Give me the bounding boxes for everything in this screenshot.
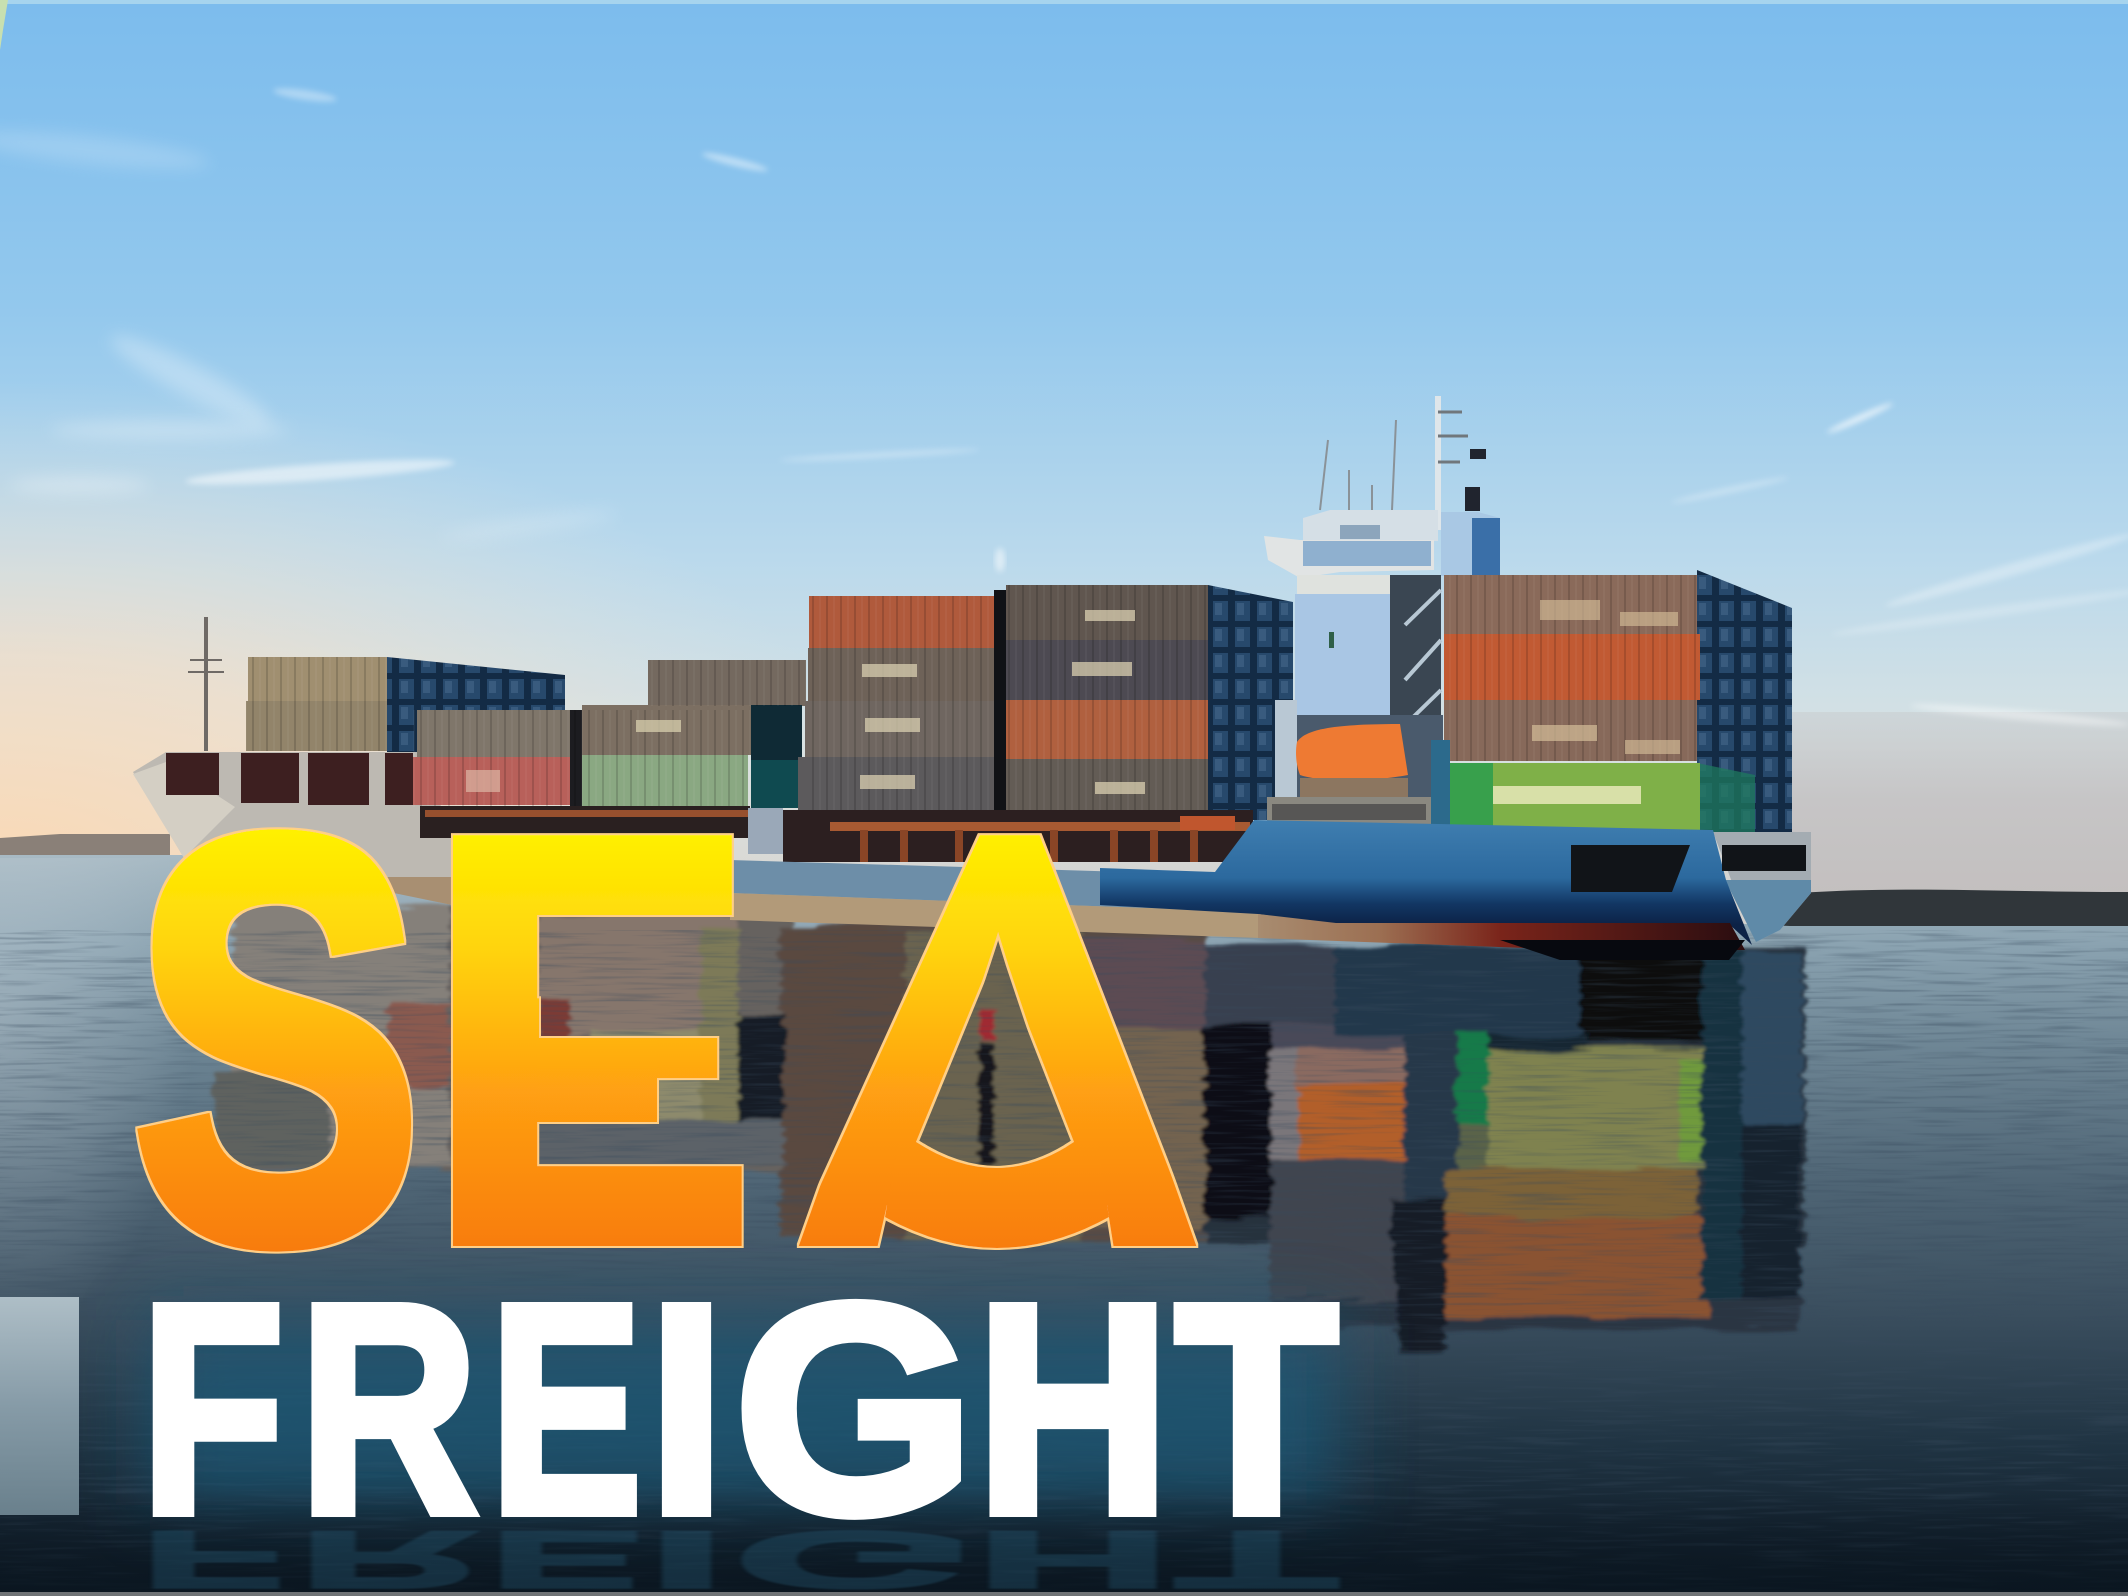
bulwark openings [166,753,413,805]
heading: FREIGHT: T [1175,1243,1338,1576]
heading: FREIGHT: I [648,1243,725,1576]
heading: FREIGHT: F [141,1243,284,1576]
mast and antennas [1320,396,1468,530]
bow hull [133,752,452,905]
superstructure side wall [1293,715,1443,800]
distant breakwaters [0,834,2128,928]
container ship [133,396,1811,960]
bridge superstructure [1264,396,1500,827]
heading: FREIGHT: H [976,1243,1170,1576]
water ripple texture [0,930,2128,1590]
bow flare facet [133,762,235,858]
haze bank on right horizon [1770,712,2128,932]
E middle arm [537,1038,657,1122]
bottom water shadow [0,1490,2128,1592]
heading reflection: FREIGHT [152,1530,1341,1590]
bridge wing [1264,536,1434,578]
cargo deck beams [420,806,1253,862]
forward mast [188,617,224,751]
water [0,855,2128,1596]
stairwell [1390,575,1441,745]
sky background [0,0,2128,930]
lifeboat [1296,724,1408,780]
hull shadow at waterline [1500,940,1745,960]
heading: SEA: E [427,718,754,1360]
bow windows and hull opening [1571,845,1806,892]
waterline stripe [1258,914,1745,950]
heading: SEA: A [796,718,1200,1360]
clouds [0,86,2128,730]
bottom edge line [0,1592,2128,1596]
left translucent strip [0,1297,79,1515]
heading: FREIGHT: E [490,1243,642,1576]
main blue hull [1100,820,1752,945]
heading: FREIGHT: R [299,1243,478,1576]
bow lower tan band [340,877,452,905]
lower bow plate [1725,880,1811,942]
centre container stacks [798,585,1293,820]
A lower bar [885,1142,1109,1248]
heading: SEA: S [132,718,422,1360]
wheelhouse top [1303,510,1438,541]
heading: FREIGHT: G [734,1243,975,1576]
flags [1465,449,1486,511]
tower [1297,575,1392,595]
water glow behind FREIGHT [150,1320,1340,1505]
mid hull band [730,860,1260,912]
forward container block [1431,570,1792,835]
ship reflection in water [215,905,1805,1350]
tan boot stripe [730,893,1260,938]
funnel side [1441,512,1500,576]
left container stack [246,657,806,808]
bow section [1713,832,1811,942]
heading: SEA [135,827,1198,1254]
deck railing [1267,797,1431,827]
